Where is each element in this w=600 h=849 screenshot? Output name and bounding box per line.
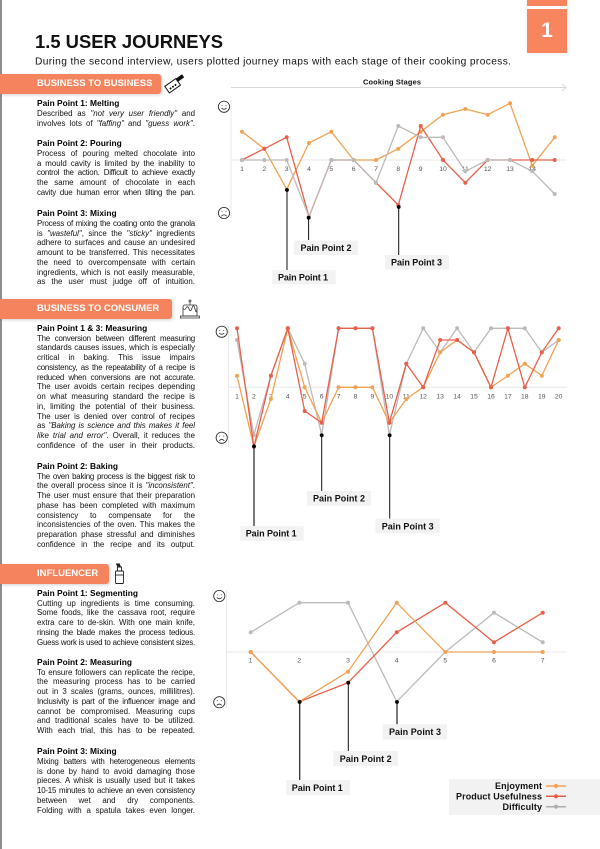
callout: pain point 2: Pain Point 2 (300, 243, 352, 253)
line: product usefulness (251, 603, 543, 702)
page left edge (0, 0, 2, 849)
callout: pain point 1 (272, 188, 336, 284)
stage numbers: 2 (252, 394, 256, 400)
pain point 1: segmenting: Guess work is used to achieve consistent sizes. (37, 638, 195, 647)
callout: pain point 1: Pain Point 1 (246, 529, 297, 539)
pain point 2: baking: the overall process since it is "inconsistent". (37, 481, 195, 490)
legend item: enjoyment (495, 781, 566, 791)
pain point 1 and 3: measuring: like trial and error". Overall, it reduces the (37, 431, 195, 440)
pain point 2: pouring: Process of pouring melted chocolate into (37, 149, 195, 158)
pain point 3: mixing: between wet and dry components. (37, 796, 195, 805)
pain point 2: measuring: To ensure followers can replicate the recipe, (37, 668, 195, 677)
pain point 1: segmenting: rinsing the blade makes the process tedious. (37, 628, 195, 637)
stage numbers: 5 (329, 166, 333, 173)
callout: pain point 1: Pain Point 1 (278, 272, 328, 282)
callout: pain point 3 (375, 433, 440, 533)
title: 1.5 USER JOURNEYS (35, 31, 223, 52)
stage numbers (235, 394, 563, 400)
pain point 1 and 3: measuring: The conversion between different measuring (37, 334, 195, 343)
line: difficulty (237, 328, 559, 435)
pain point 2: pouring: the same amount of chocolate in each (37, 178, 195, 187)
icon: cake (180, 300, 200, 318)
pain point 2: pouring: control the action. Difficult to achieve exactly (37, 168, 195, 177)
panel: influencer (0, 564, 196, 815)
pain point 2: baking: preparation phase stressful and diminishes (37, 530, 195, 539)
legend (449, 779, 600, 815)
pain point 1: segmenting (37, 588, 195, 647)
stage numbers: 18 (521, 394, 529, 400)
pain point 3: mixing: Process of mixing the coating onto the granola (37, 219, 195, 228)
page number tab (527, 0, 567, 53)
callout: pain point 2: Pain Point 2 (313, 494, 365, 504)
stage numbers: 1 (235, 394, 239, 400)
stage numbers: 11 (403, 394, 410, 400)
pain point 1: segmenting: extra care to de-skin. With one main knife, (37, 618, 195, 627)
pain point 2: measuring: Inclusivity is part of the influencer image and (37, 697, 195, 706)
line: difficulty (251, 603, 543, 702)
callout: pain point 3: Pain Point 3 (382, 521, 434, 531)
pain point 1: melting: Described as "not very user friendly" and (37, 109, 195, 118)
pain point 2: baking: phase has been completed with maximum (37, 501, 195, 510)
cooking stages arrow: Cooking Stages (363, 78, 421, 86)
callout: pain point 3 (383, 700, 447, 740)
callout: pain point 2 (307, 433, 371, 506)
stage numbers: 2 (297, 658, 301, 665)
panel: business to consumer (0, 298, 200, 549)
banner: business to business (0, 74, 161, 94)
stage numbers: 20 (555, 394, 563, 400)
pain point 2: baking: inconsistencies of the oven. This makes the (37, 520, 195, 529)
callout: pain point 1 (286, 700, 350, 795)
callout: pain point 2 (294, 216, 358, 255)
pain point 2: pouring: a mould cavity is limited by the inability to (37, 159, 195, 168)
chart: business to consumer journey map (216, 326, 567, 540)
banner: business to business: BUSINESS TO BUSINESS (37, 78, 152, 89)
icon: spray bottle (115, 564, 124, 584)
pain point 1: melting: involves lots of "faffing" and "guess work". (37, 119, 195, 128)
icon: happy face (216, 326, 227, 337)
pain point 2: pouring: cavity due human error when tilting the pan. (37, 188, 195, 197)
pain point 3: mixing: the need to overcompensate with certain (37, 258, 195, 267)
stage numbers: 15 (470, 394, 478, 400)
stage numbers: 12 (484, 166, 492, 173)
stage numbers: 7 (374, 166, 378, 173)
stage numbers: 1 (249, 658, 253, 665)
stage numbers: 6 (492, 658, 496, 665)
line: enjoyment (251, 603, 543, 702)
legend item: difficulty: Difficulty (502, 802, 542, 812)
pain point 3: mixing (37, 208, 196, 286)
stage numbers: 19 (538, 394, 546, 400)
stage numbers: 10 (439, 166, 447, 173)
pain point 2: measuring: cannot be compromised. Measuring cups (37, 707, 195, 716)
chart: influencer journey map (213, 590, 567, 795)
pain point 1: melting: Pain Point 1: Melting (37, 98, 119, 108)
pain point 1 and 3: measuring: reduced when conversions are not accurate. (37, 373, 195, 382)
pain point 3: mixing: amount to be transferred. This necessitates (37, 248, 195, 257)
stage numbers (240, 166, 536, 173)
stage numbers: 8 (396, 166, 400, 173)
stage numbers: 9 (371, 394, 375, 400)
pain point 1 and 3: measuring: standards causes issues, which is especially (37, 343, 195, 352)
stage numbers: 4 (307, 166, 311, 173)
pain point 1 and 3: measuring: Pain Point 1 & 3: Measuring (37, 323, 147, 333)
callout: pain point 1 (240, 444, 304, 541)
stage numbers: 2 (262, 166, 266, 173)
stage numbers: 17 (504, 394, 512, 400)
stage numbers: 16 (487, 394, 495, 400)
banner: influencer (0, 564, 109, 584)
stage numbers: 13 (436, 394, 444, 400)
pain point 1 and 3: measuring: confidence of the user in their products. (37, 441, 195, 450)
pain point 2: measuring: With each trial, this has to be repeated. (37, 726, 195, 735)
callout: pain point 3: Pain Point 3 (389, 727, 441, 737)
pain point 1 and 3: measuring: consistency, as the repeatability of a recipe is (37, 363, 195, 372)
banner: business to consumer: BUSINESS TO CONSUMER (37, 303, 159, 314)
pain point 3: mixing: as the user must judge off of intuition. (37, 277, 195, 286)
stage numbers: 14 (529, 166, 536, 173)
legend item: difficulty (502, 802, 566, 812)
pain point 3: mixing: 10-15 minutes to achieve an even consistency (37, 786, 195, 795)
stage numbers: 10 (386, 394, 393, 400)
pain point 3: mixing: Folding with a spatula takes even longer. (37, 806, 195, 815)
stage numbers: 13 (506, 166, 514, 173)
pain point 2: baking: The oven baking process is the biggest risk to (37, 472, 195, 481)
line: product usefulness (237, 328, 559, 447)
stage numbers (249, 658, 545, 665)
pain point 1 and 3: measuring: in, limiting the potential of their business. (37, 402, 195, 411)
pain point 1: segmenting: Cutting up ingredients is time consuming. (37, 599, 195, 608)
panel: business to business (0, 74, 196, 286)
pain point 2: pouring (37, 138, 196, 197)
stage numbers: 1 (240, 166, 244, 173)
stage numbers: 4 (286, 394, 290, 400)
legend item: product usefulness: Product Usefulness (456, 792, 542, 802)
pain point 2: measuring: the measuring process has to be carried (37, 677, 195, 686)
callout: pain point 3: Pain Point 3 (391, 258, 442, 268)
stage numbers: 12 (419, 394, 427, 400)
pain point 1: segmenting: Some foods, like the cassava root, require (37, 608, 195, 617)
stage numbers: 6 (320, 394, 324, 400)
icon: cleaver (164, 74, 184, 94)
pain point 1: melting (37, 98, 195, 128)
pain point 3: mixing: is done by hand to avoid damaging those (37, 767, 195, 776)
pain point 3: mixing: adhere to surfaces and cause an undesired (37, 238, 195, 247)
pain point 2: measuring (37, 657, 195, 735)
icon: happy face (214, 590, 225, 602)
pain point 3: mixing: Pain Point 3: Mixing (37, 208, 117, 218)
pain point 3: mixing: pieces. A whisk is usually used but it takes (37, 776, 195, 785)
callout: pain point 1: Pain Point 1 (292, 783, 343, 793)
banner: business to consumer (0, 299, 172, 318)
line: product usefulness (242, 126, 555, 217)
pain point 2: baking: Pain Point 2: Baking (37, 461, 118, 471)
stage numbers: 7 (337, 394, 341, 400)
line: enjoyment (237, 328, 559, 447)
pain point 1 and 3: measuring: critical in baking. This issue impairs (37, 353, 195, 362)
pain point 2: pouring: Pain Point 2: Pouring (37, 138, 122, 148)
pain point 1 and 3: measuring: as "Baking is science and this makes it feel (37, 421, 195, 430)
pain point 3: mixing: is "wasteful", since the "sticky" ingredients (37, 229, 195, 238)
callout: pain point 2 (333, 681, 398, 766)
pain point 2: measuring: out in 3 scales (grams, ounces, millilitres). (37, 687, 195, 696)
stage numbers: 11 (462, 166, 469, 173)
callout: pain point 2: Pain Point 2 (340, 754, 392, 764)
icon: sad face (216, 432, 227, 443)
pain point 1 and 3: measuring (37, 323, 196, 450)
page number tab: 1 (541, 18, 553, 42)
stage numbers: 6 (352, 166, 356, 173)
pain point 2: baking: The user must ensure that their preparation (37, 491, 195, 500)
stage numbers: 4 (395, 658, 399, 665)
pain point 3: mixing: Pain Point 3: Mixing (37, 746, 117, 756)
stage numbers: 7 (541, 658, 545, 665)
pain point 2: measuring: and traditional scales have to be utilized. (37, 716, 195, 725)
stage numbers: 14 (453, 394, 461, 400)
stage numbers: 5 (303, 394, 307, 400)
subtitle: During the second interview, users plotted journey maps with each stage of their cooking process. (35, 56, 511, 68)
pain point 3: mixing (37, 746, 196, 815)
stage numbers: 8 (354, 394, 358, 400)
pain point 3: mixing: Mixing batters with heterogeneous elements (37, 757, 195, 766)
pain point 2: baking (37, 461, 195, 549)
cooking stages arrow (231, 78, 566, 92)
chart: business to business journey map (218, 100, 566, 284)
pain point 2: measuring: Pain Point 2: Measuring (37, 657, 132, 667)
stage numbers: 3 (285, 166, 289, 173)
banner: influencer: INFLUENCER (37, 568, 98, 579)
pain point 3: mixing: ingredients, which is not easily measurable, (37, 268, 195, 277)
line: difficulty (242, 126, 555, 217)
callout: pain point 3 (385, 205, 449, 270)
icon: sad face (214, 697, 225, 708)
stage numbers: 3 (269, 394, 273, 400)
stage numbers: 9 (419, 166, 423, 173)
pain point 2: baking: consistency to compensate for the (37, 511, 195, 520)
stage numbers: 3 (346, 658, 350, 665)
icon: happy face (218, 101, 230, 112)
pain point 2: baking: confidence in the recipe and its output. (37, 540, 195, 549)
pain point 1 and 3: measuring: The user is denied over control of recipes (37, 412, 195, 421)
icon: sad face (218, 207, 230, 219)
pain point 1 and 3: measuring: on what measuring standard the recipe is (37, 392, 195, 401)
stage numbers: 5 (443, 658, 447, 665)
line: enjoyment (242, 103, 555, 189)
pain point 1 and 3: measuring: The user avoids certain recipes depending (37, 382, 195, 391)
legend item: enjoyment: Enjoyment (495, 781, 542, 791)
pain point 1: segmenting: Pain Point 1: Segmenting (37, 588, 138, 598)
